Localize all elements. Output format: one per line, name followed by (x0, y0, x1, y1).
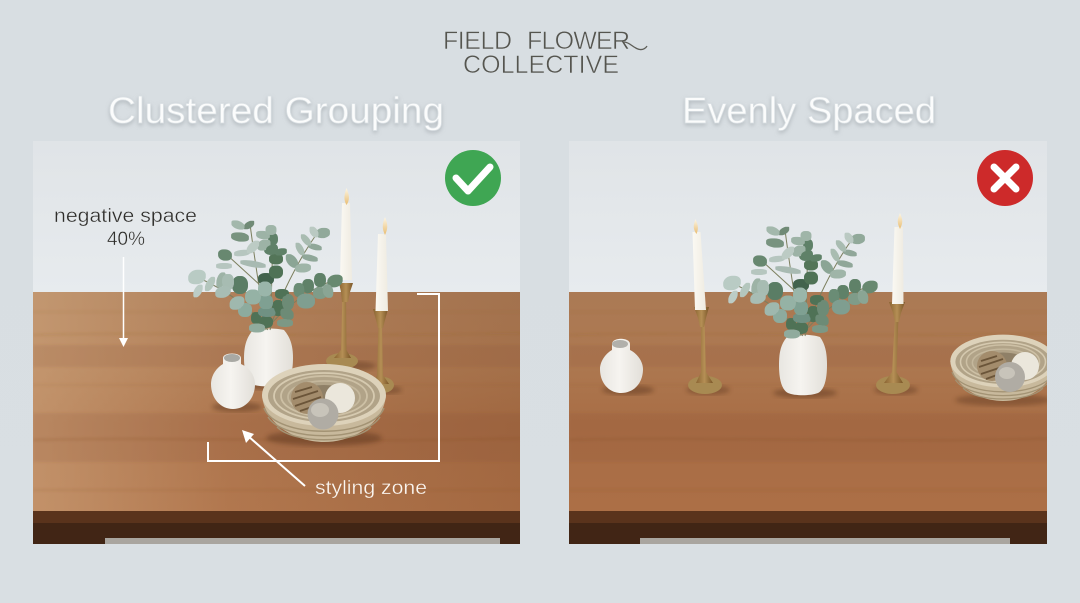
table top (569, 292, 1069, 511)
styling zone bracket (208, 294, 439, 461)
vase: large white (773, 335, 837, 398)
panel: clustered grouping photo (33, 141, 533, 544)
woven basket with balls (950, 335, 1056, 406)
icon: green check (445, 150, 501, 206)
arrow: styling zone pointer (242, 430, 305, 486)
table front edge (33, 511, 520, 544)
heading: Clustered Grouping: Clustered Grouping (108, 90, 444, 131)
annotation: negative space 40% (54, 206, 197, 250)
heading: Evenly Spaced: Evenly Spaced (682, 90, 936, 131)
icon: red cross (977, 150, 1033, 206)
panel: evenly spaced photo (569, 141, 1069, 544)
eucalyptus sprig (722, 226, 878, 338)
brand logo: FLOWER (527, 27, 630, 55)
eucalyptus sprig (187, 220, 343, 332)
woven basket with balls (262, 364, 386, 446)
brand logo: FIELD (443, 27, 512, 55)
wall (33, 141, 520, 292)
brand logo (443, 27, 647, 79)
table top (33, 292, 533, 511)
label: styling zone: styling zone (315, 478, 427, 499)
vase: small white (211, 354, 262, 412)
wall (569, 141, 1047, 292)
candle: left (686, 219, 730, 395)
vase: large white (244, 328, 293, 391)
table front edge (569, 511, 1047, 544)
arrow: down to table (119, 257, 128, 347)
candle: right (874, 213, 918, 395)
candle: short right (372, 217, 402, 394)
annotation: negative space 40%: negative space (54, 206, 197, 227)
candle: tall left (326, 188, 376, 371)
vase: small white (600, 339, 654, 395)
brand logo: COLLECTIVE (463, 51, 619, 79)
annotation: negative space 40%: 40% (107, 229, 145, 250)
